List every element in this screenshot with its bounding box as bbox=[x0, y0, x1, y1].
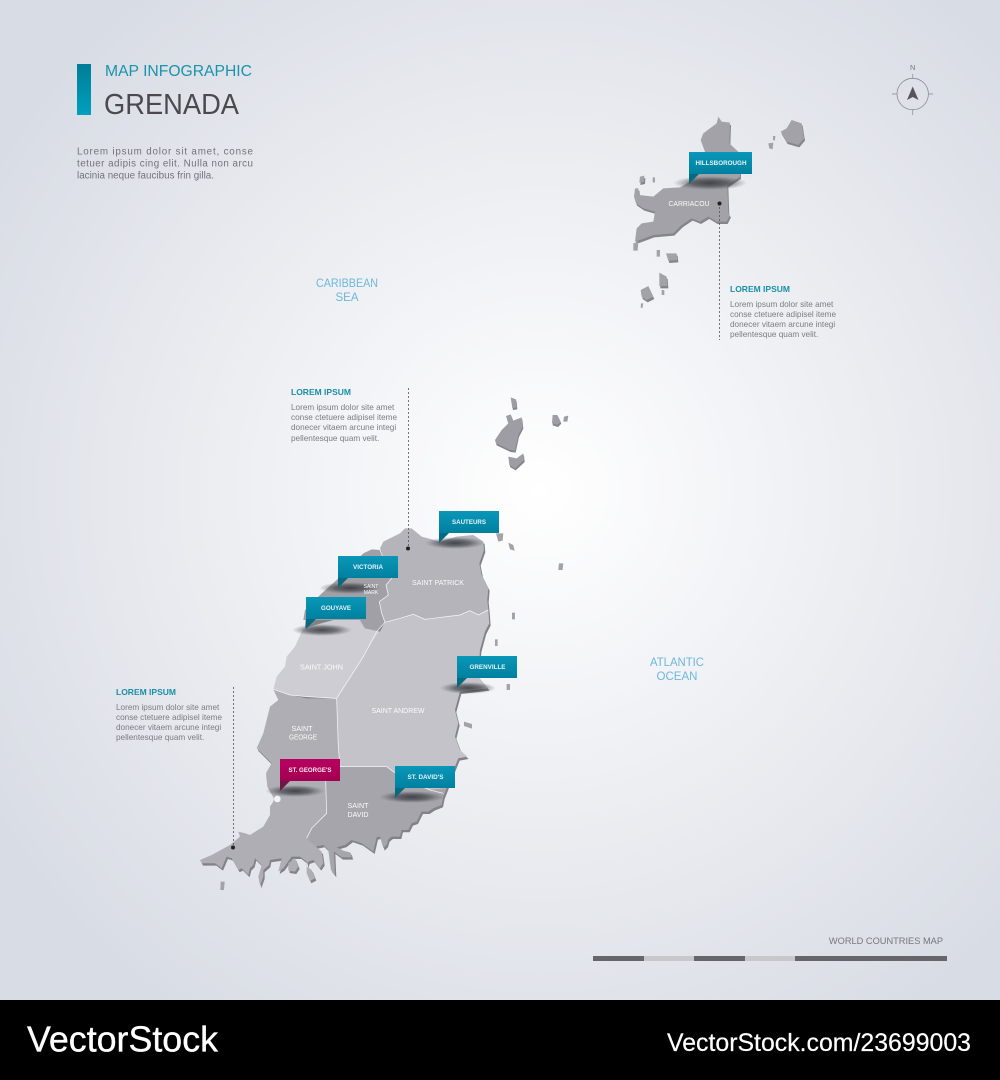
region: Saint David bbox=[307, 767, 447, 875]
title kicker: MAP INFOGRAPHIC bbox=[105, 63, 252, 80]
eastern islets bbox=[220, 533, 563, 890]
callout: Saint George: conse ctetuere adipisel iteme bbox=[116, 713, 222, 722]
region labels: SAINT bbox=[348, 801, 369, 810]
title: GRENADA bbox=[104, 89, 240, 121]
intro text bbox=[77, 146, 254, 182]
map: northern islets bbox=[495, 397, 568, 470]
sea label: Caribbean Sea bbox=[316, 278, 378, 304]
callout: Saint George: Lorem ipsum dolor site amet bbox=[116, 703, 220, 712]
callout: Saint Patrick: LOREM IPSUM bbox=[291, 387, 351, 397]
island extrusion bbox=[201, 531, 491, 888]
intro text: lacinia neque faucibus frin gilla. bbox=[77, 170, 214, 182]
region labels: SAINT JOHN bbox=[300, 662, 343, 672]
region: Saint John bbox=[273, 620, 380, 698]
region: Saint Andrew bbox=[337, 610, 489, 790]
callout: Carriacou bbox=[718, 202, 836, 340]
callout: Carriacou: donecer vitaem arcune integi bbox=[730, 320, 835, 329]
intro text: tetuer adipis cing elit. Nulla non arcu bbox=[77, 158, 253, 170]
callout: Saint George: pellentesque quam velit. bbox=[116, 733, 204, 742]
sea label: Caribbean Sea: SEA bbox=[335, 292, 359, 304]
offshore rock bbox=[288, 858, 298, 872]
callout: Saint Patrick bbox=[291, 387, 410, 550]
region labels: GEORGE bbox=[289, 732, 317, 742]
compass: N bbox=[910, 63, 915, 72]
marker: Gouyave: GOUYAVE bbox=[321, 605, 351, 612]
marker: Grenville: GRENVILLE bbox=[470, 664, 506, 671]
region labels: CARRIACOU bbox=[668, 199, 710, 208]
marker: St. George's bbox=[265, 759, 340, 797]
region: Saint Patrick bbox=[379, 528, 488, 622]
region labels: SAINT bbox=[292, 724, 313, 733]
callout: Saint Patrick: conse ctetuere adipisel iteme bbox=[291, 413, 397, 422]
marker: Victoria bbox=[319, 556, 398, 594]
sea label: Atlantic Ocean: OCEAN bbox=[657, 671, 697, 683]
callout: Carriacou: pellentesque quam velit. bbox=[730, 330, 818, 339]
marker: Hillsborough: HILLSBOROUGH bbox=[696, 160, 747, 167]
callout: Saint Patrick: Lorem ipsum dolor site amet bbox=[291, 403, 395, 412]
scale bar: WORLD COUNTRIES MAP bbox=[829, 936, 943, 946]
title accent bar bbox=[77, 64, 91, 115]
callout: Saint George bbox=[116, 687, 235, 850]
title block bbox=[77, 63, 254, 182]
region labels: SAINT bbox=[364, 584, 378, 590]
marker: St. David's bbox=[379, 766, 455, 803]
region labels bbox=[289, 199, 710, 819]
region labels: SAINT ANDREW bbox=[372, 706, 425, 715]
marker: Grenville bbox=[440, 656, 517, 694]
callout: Saint Patrick: pellentesque quam velit. bbox=[291, 434, 379, 443]
footer brand: VectorStock bbox=[27, 1018, 219, 1060]
marker: Sauteurs bbox=[425, 511, 499, 549]
compass bbox=[892, 63, 933, 115]
map: Carriacou islands bbox=[633, 117, 805, 308]
sea label: Caribbean Sea: CARIBBEAN bbox=[316, 278, 378, 290]
region: Saint George bbox=[200, 689, 340, 886]
marker: Gouyave bbox=[292, 597, 366, 636]
region labels: SAINT PATRICK bbox=[412, 578, 464, 587]
sea label: Atlantic Ocean bbox=[650, 657, 704, 683]
marker: Hillsborough bbox=[673, 152, 752, 190]
callout: Saint Patrick: donecer vitaem arcune integi bbox=[291, 423, 396, 432]
callout: Saint George: LOREM IPSUM bbox=[116, 687, 176, 697]
callout: Saint George: donecer vitaem arcune integi bbox=[116, 723, 221, 732]
sea label: Atlantic Ocean: ATLANTIC bbox=[650, 657, 704, 669]
intro text: Lorem ipsum dolor sit amet, conse bbox=[77, 146, 254, 158]
footer band bbox=[0, 1000, 1000, 1080]
map: Grenada main island bbox=[200, 528, 563, 890]
footer image id: VectorStock.com/23699003 bbox=[667, 1029, 971, 1057]
region: Saint Mark bbox=[303, 549, 392, 632]
marker: Sauteurs: SAUTEURS bbox=[452, 519, 486, 526]
marker: St. David's: ST. DAVID'S bbox=[408, 774, 444, 781]
region labels: MARK bbox=[364, 590, 379, 596]
callout: Carriacou: conse ctetuere adipisel iteme bbox=[730, 310, 836, 319]
harbor bbox=[274, 796, 281, 802]
region labels: DAVID bbox=[348, 810, 368, 819]
region borders bbox=[273, 550, 488, 838]
scale bar bbox=[593, 936, 947, 961]
marker: Victoria: VICTORIA bbox=[353, 564, 383, 571]
callout: Carriacou: Lorem ipsum dolor site amet bbox=[730, 300, 834, 309]
callout: Carriacou: LOREM IPSUM bbox=[730, 284, 790, 294]
marker: St. George's: ST. GEORGE'S bbox=[288, 767, 332, 774]
